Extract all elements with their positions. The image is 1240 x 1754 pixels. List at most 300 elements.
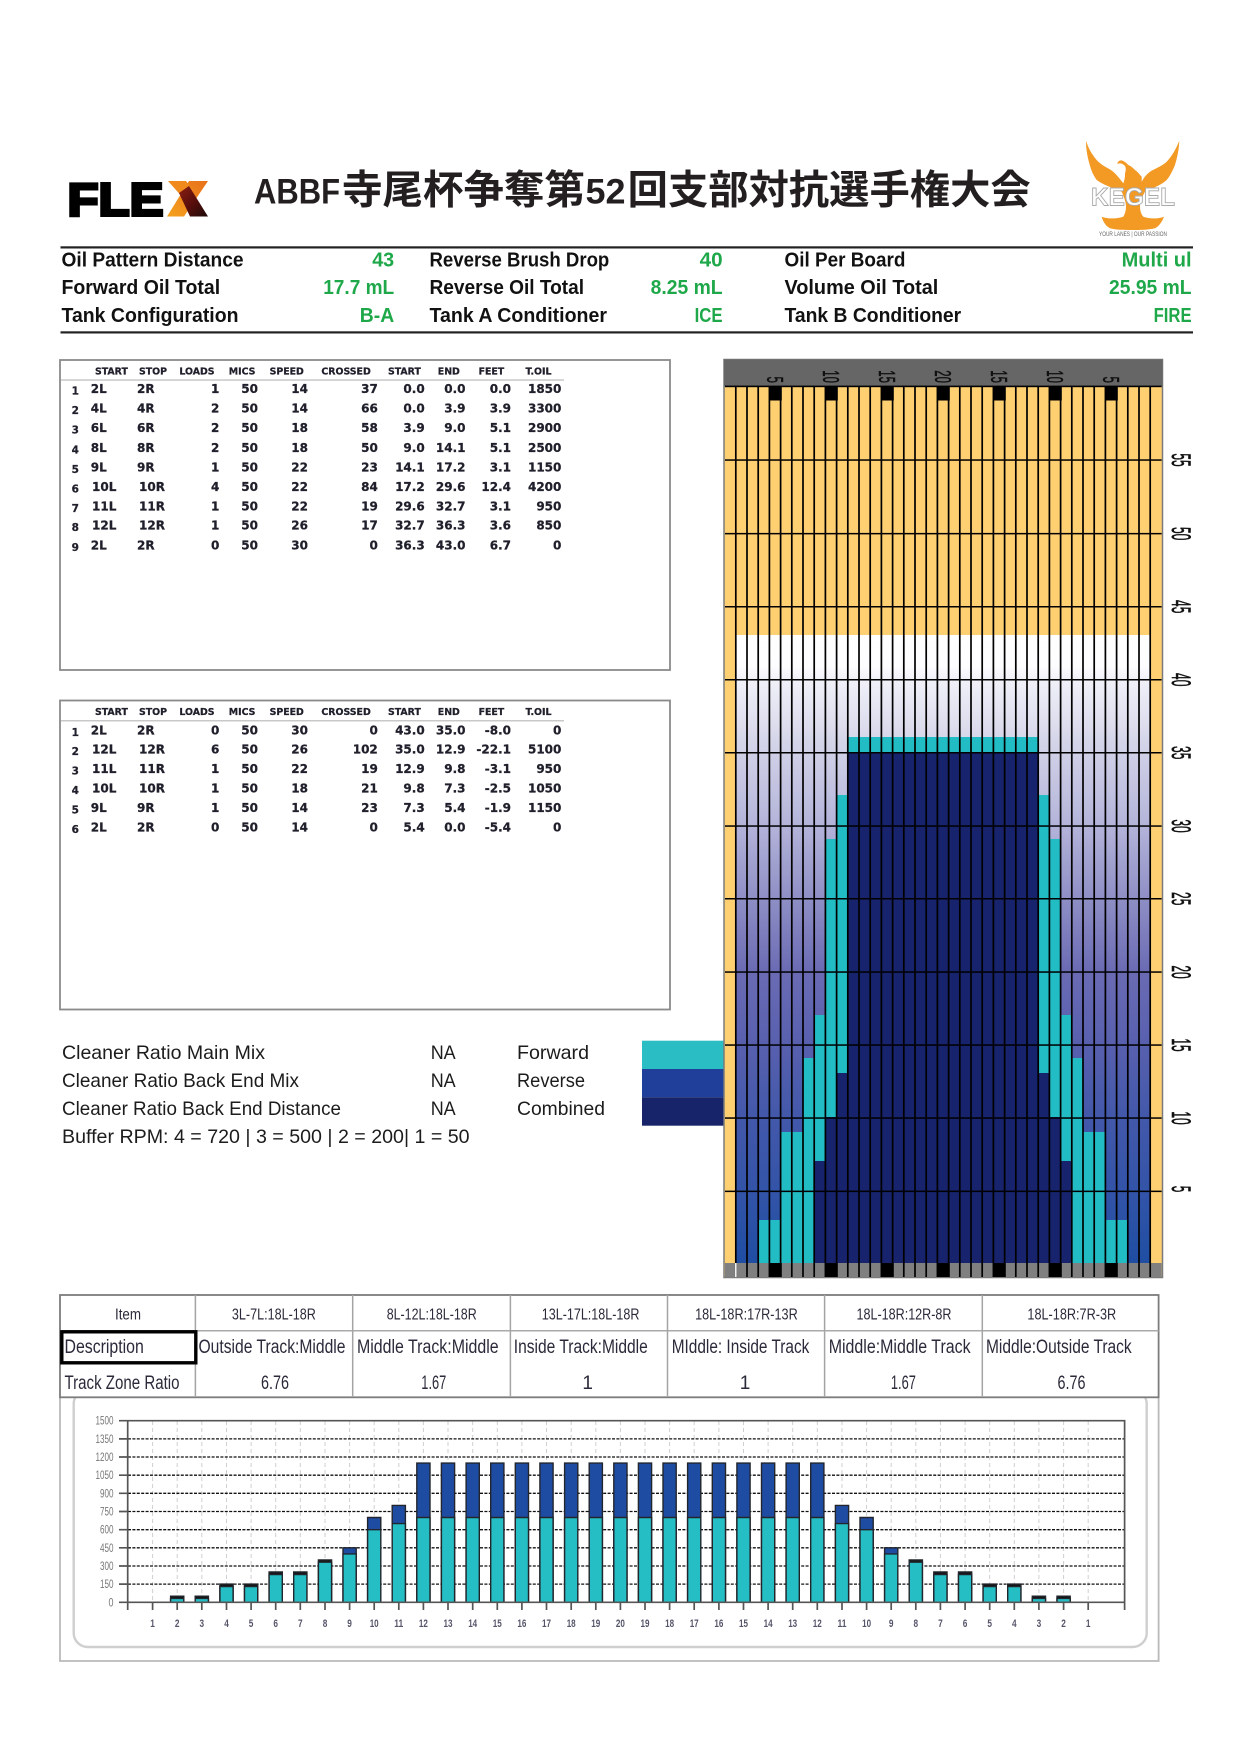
forward table numeric values: 9.0 — [403, 441, 425, 455]
reverse table numeric values: 50 — [241, 743, 258, 757]
reverse table numeric values: 0 — [211, 820, 219, 834]
distance labels: 55 — [1166, 453, 1196, 467]
reverse table start and stop boards: 10R — [139, 782, 165, 796]
forward table numeric values: 1850 — [528, 382, 561, 396]
forward table numeric values: 30 — [291, 538, 308, 552]
table row: item: Item — [115, 1306, 141, 1324]
y axis labels: 1200 — [96, 1452, 114, 1464]
y axis labels: 0 — [108, 1597, 114, 1609]
forward table numeric values: 43.0 — [436, 538, 466, 552]
labels column 1: Tank Configuration — [62, 305, 238, 327]
x axis board labels: 20 — [616, 1618, 625, 1630]
x axis board labels: 9 — [347, 1618, 352, 1630]
forward table numeric values: 1 — [211, 499, 219, 513]
title — [254, 168, 1031, 212]
forward table start and stop boards: 10R — [139, 480, 165, 494]
distance labels: 25 — [1166, 892, 1196, 905]
x axis board labels: 3 — [1037, 1618, 1041, 1630]
forward table numeric values: 22 — [291, 460, 308, 474]
forward table numeric values: 3.9 — [403, 421, 425, 435]
reverse table numeric values: 50 — [241, 782, 258, 796]
forward table header row — [95, 366, 551, 377]
lane oil graph: 15 — [986, 370, 1012, 383]
reverse table numeric values: 9.8 — [403, 782, 425, 796]
x axis board labels: 10 — [862, 1618, 871, 1630]
forward table numeric values: 1 — [211, 519, 219, 533]
forward table numeric values: 58 — [361, 421, 378, 435]
reverse table row index — [72, 727, 79, 836]
forward table header row: LOADS — [179, 366, 215, 377]
forward table numeric values: 50 — [241, 421, 258, 435]
table row: description: Inside Track:Middle — [514, 1337, 648, 1358]
x axis board labels: 2 — [175, 1618, 180, 1630]
forward table numeric values: 50 — [361, 441, 378, 455]
values column 1 — [323, 250, 394, 327]
forward table numeric values: 50 — [241, 441, 258, 455]
x axis board labels: 15 — [493, 1618, 502, 1630]
table row: item: 18L-18R:12R-8R — [856, 1306, 952, 1324]
table row: item: 18L-18R:7R-3R — [1027, 1306, 1116, 1324]
table row: track zone ratio: 1 — [582, 1373, 593, 1394]
board number labels: 5 — [762, 376, 788, 383]
cleaner and buffer notes: Buffer RPM: 4 = 720 | 3 = 500 | 2 = 200| 1 = 50 — [62, 1126, 470, 1148]
forward table start and stop boards: 2L — [91, 538, 107, 552]
reverse table numeric values: -2.5 — [485, 782, 511, 796]
values column 3: FIRE — [1154, 305, 1192, 327]
table row: description: Description — [64, 1337, 144, 1358]
values column 1: 43 — [372, 250, 394, 272]
labels column 1: Forward Oil Total — [62, 277, 220, 299]
reverse table numeric values: 1050 — [528, 782, 561, 796]
forward table numeric values: 2 — [211, 421, 219, 435]
forward table numeric values: 19 — [361, 499, 378, 513]
x axis board labels: 6 — [273, 1618, 278, 1630]
y axis labels: 1350 — [96, 1434, 114, 1446]
reverse table numeric values: 1150 — [528, 801, 561, 815]
x axis board labels: 10 — [370, 1618, 379, 1630]
reverse table numeric values: 5.4 — [444, 801, 466, 815]
x axis board labels: 18 — [665, 1618, 674, 1630]
forward table row index — [72, 386, 79, 554]
forward table numeric values: 0 — [553, 538, 561, 552]
table row: track zone ratio: 1 — [740, 1373, 750, 1394]
reverse table start and stop boards: 2R — [137, 723, 155, 737]
values column 2: 8.25 mL — [651, 277, 723, 299]
reverse table numeric values: 43.0 — [395, 723, 425, 737]
forward table numeric values: 23 — [361, 460, 378, 474]
values column 3: 25.95 mL — [1109, 277, 1192, 299]
reverse table numeric values: 1 — [211, 801, 219, 815]
forward table numeric values: 22 — [291, 480, 308, 494]
logo: FLEX — [68, 174, 208, 226]
forward table start and stop boards: 9R — [137, 460, 155, 474]
reverse table numeric values: 7.3 — [444, 782, 466, 796]
forward table start and stop boards: 8R — [137, 441, 155, 455]
labels column 2: Reverse Oil Total — [430, 277, 584, 299]
reverse table numeric values: 50 — [241, 762, 258, 776]
reverse table numeric values: 950 — [536, 762, 561, 776]
reverse table numeric values: -22.1 — [476, 743, 511, 757]
table row: description: Outside Track:Middle — [198, 1337, 346, 1358]
values column 1: B-A — [360, 305, 394, 327]
forward table numeric values: 17 — [361, 519, 378, 533]
forward table numeric values: 0.0 — [490, 382, 511, 396]
reverse table numeric values: 1 — [211, 762, 219, 776]
labels column 3: Volume Oil Total — [784, 277, 938, 299]
forward table row index: 8 — [72, 522, 79, 534]
reverse table header row: START — [388, 707, 421, 718]
x axis board labels: 1 — [150, 1618, 155, 1630]
table row: track zone ratio: Track Zone Ratio — [64, 1373, 180, 1394]
reverse table numeric values: 18 — [291, 782, 308, 796]
reverse table start and stop boards — [91, 723, 165, 834]
reverse table numeric values: -5.4 — [485, 820, 511, 834]
distance labels: 15 — [1166, 1038, 1196, 1052]
forward table header row: MICS — [229, 366, 256, 377]
values column 3: Multi ul — [1122, 250, 1192, 272]
distance labels — [1166, 453, 1196, 1192]
forward table numeric values: 84 — [361, 480, 378, 494]
reverse table start and stop boards: 12R — [139, 743, 165, 757]
forward table numeric values: 14.1 — [436, 441, 466, 455]
reverse table numeric values: 14 — [291, 801, 308, 815]
labels column 3: Tank B Conditioner — [784, 305, 961, 327]
lane oil graph: 10 — [818, 370, 844, 383]
forward table row index: 6 — [72, 484, 79, 496]
logo: KEGEL phoenix: KEGEL — [1091, 184, 1175, 212]
forward table numeric values: 50 — [241, 401, 258, 415]
x axis board labels: 5 — [987, 1618, 992, 1630]
title: ABBF — [254, 172, 340, 212]
reverse table numeric values: 1 — [211, 782, 219, 796]
forward table start and stop boards: 6R — [137, 421, 155, 435]
cleaner and buffer notes: Cleaner Ratio Back End Mix — [62, 1070, 299, 1092]
values column 2 — [651, 250, 723, 327]
distance labels: 10 — [1166, 1111, 1196, 1125]
x axis board labels: 17 — [690, 1618, 699, 1630]
x axis board labels: 19 — [640, 1618, 650, 1630]
lane oil graph: 10 — [1042, 370, 1068, 383]
forward table numeric values: 37 — [361, 382, 378, 396]
vertical light grid — [153, 1421, 1088, 1602]
forward table start and stop boards: 10L — [92, 480, 117, 494]
forward table numeric values: 950 — [536, 499, 561, 513]
distance labels: 40 — [1166, 673, 1196, 686]
forward table header row: END — [438, 366, 460, 377]
x axis board labels: 13 — [444, 1618, 452, 1630]
forward table row index: 5 — [72, 464, 79, 476]
forward table numeric values: 29.6 — [395, 499, 425, 513]
y axis labels: 450 — [100, 1543, 114, 1555]
forward table numeric values: 12.4 — [481, 480, 511, 494]
lane oil graph — [724, 360, 1196, 1278]
board number labels — [762, 370, 1124, 383]
forward table numeric values: 9.0 — [444, 421, 466, 435]
forward table numeric values: 50 — [241, 519, 258, 533]
x axis board labels: 1 — [1086, 1618, 1090, 1630]
reverse table numeric values: 12.9 — [436, 743, 466, 757]
reverse table start and stop boards: 9L — [91, 801, 107, 815]
forward table numeric values: 1150 — [528, 460, 561, 474]
reverse table header row — [95, 707, 551, 718]
bottom arrow markers — [735, 1263, 1118, 1277]
legend: Forward — [517, 1042, 589, 1064]
forward table start and stop boards: 6L — [91, 421, 107, 435]
forward table numeric values: 0 — [369, 538, 378, 552]
forward table numeric values — [211, 382, 561, 552]
reverse table header row: START — [95, 707, 128, 718]
reverse table numeric values: 0.0 — [444, 820, 466, 834]
reverse table row index: 6 — [72, 824, 79, 836]
panel: oil per board chart — [60, 1390, 1159, 1661]
forward table numeric values: 50 — [241, 480, 258, 494]
x axis board labels: 19 — [591, 1618, 600, 1630]
x axis board labels: 12 — [813, 1618, 822, 1630]
forward table start and stop boards: 4L — [91, 401, 107, 415]
lane oil graph: 15 — [874, 370, 900, 383]
legend: Combined — [517, 1098, 605, 1120]
labels column 2 — [430, 250, 609, 327]
forward table start and stop boards: 12R — [139, 519, 165, 533]
table row: description — [64, 1337, 1132, 1358]
forward table numeric values: 5.1 — [490, 441, 511, 455]
x axis board labels: 16 — [517, 1618, 526, 1630]
forward table numeric values: 14.1 — [395, 460, 425, 474]
x axis board labels: 18 — [567, 1618, 576, 1630]
cleaner and buffer notes: Cleaner Ratio Main Mix — [62, 1042, 265, 1064]
forward table numeric values: 22 — [291, 499, 308, 513]
track zone ratio table — [60, 1295, 1159, 1397]
reverse oil gradient background — [736, 635, 1151, 1263]
forward table start and stop boards: 2R — [137, 538, 155, 552]
forward table numeric values: 50 — [241, 382, 258, 396]
forward table numeric values: 66 — [361, 401, 378, 415]
reverse table numeric values: 23 — [361, 801, 378, 815]
reverse table numeric values: 50 — [241, 801, 258, 815]
reverse table numeric values: 6 — [211, 743, 219, 757]
x axis board labels: 17 — [542, 1618, 551, 1630]
x axis board labels — [150, 1618, 1090, 1630]
reverse table numeric values: 5100 — [528, 743, 561, 757]
distance labels: 45 — [1166, 600, 1196, 613]
x axis board labels: 8 — [323, 1618, 327, 1630]
values column 3 — [1109, 250, 1192, 327]
forward table numeric values: 18 — [291, 441, 308, 455]
forward table numeric values: 50 — [241, 460, 258, 474]
forward table numeric values: 0.0 — [444, 382, 466, 396]
x axis board labels: 6 — [963, 1618, 967, 1630]
table row: description: Middle:Middle Track — [829, 1337, 971, 1358]
forward table start and stop boards: 11R — [139, 499, 165, 513]
forward table header row: FEET — [479, 366, 505, 377]
forward table numeric values: 26 — [291, 519, 308, 533]
reverse table numeric values: 0 — [369, 820, 378, 834]
y axis labels: 750 — [100, 1506, 114, 1518]
foul line band — [725, 1263, 1162, 1277]
forward table numeric values: 32.7 — [436, 499, 466, 513]
table row: item — [115, 1306, 1116, 1324]
reverse table numeric values: 14 — [291, 820, 308, 834]
forward table row index: 7 — [72, 503, 79, 515]
forward table numeric values: 14 — [291, 382, 308, 396]
y axis labels — [96, 1416, 114, 1609]
values column 2: ICE — [695, 305, 723, 327]
reverse table start and stop boards: 2R — [137, 820, 155, 834]
forward table numeric values: 4 — [211, 480, 219, 494]
reverse table numeric values: 35.0 — [395, 743, 425, 757]
forward table numeric values: 36.3 — [436, 519, 466, 533]
reverse table numeric values: 19 — [361, 762, 378, 776]
labels column 3: Oil Per Board — [784, 250, 905, 272]
reverse table row index: 1 — [72, 727, 79, 739]
x axis board labels: 9 — [889, 1618, 894, 1630]
forward table numeric values: 0.0 — [403, 401, 425, 415]
x axis board labels: 14 — [764, 1618, 773, 1630]
panel: forward oil table — [60, 360, 670, 670]
x axis board labels: 2 — [1061, 1618, 1066, 1630]
reverse table numeric values: 35.0 — [436, 723, 466, 737]
lane oil graph: 5 — [1166, 1186, 1196, 1192]
reverse table header row: LOADS — [179, 707, 215, 718]
forward table numeric values: 3.1 — [490, 499, 511, 513]
reverse table numeric values: 30 — [291, 723, 308, 737]
forward table header row: START — [95, 366, 128, 377]
table row: item: 18L-18R:17R-13R — [695, 1306, 798, 1324]
table row: description: Middle Track:Middle — [357, 1337, 499, 1358]
forward table row index: 2 — [72, 405, 79, 417]
forward table numeric values: 6.7 — [490, 538, 511, 552]
reverse table numeric values: 0 — [553, 820, 561, 834]
reverse table numeric values: 21 — [361, 782, 378, 796]
labels column 2: Tank A Conditioner — [430, 305, 607, 327]
logo: KEGEL phoenix: YOUR LANES | OUR PASSION — [1099, 232, 1167, 238]
forward table numeric values: 4200 — [528, 480, 561, 494]
horizontal dashed grid — [128, 1439, 1125, 1584]
chart axes and ticks — [119, 1421, 1125, 1610]
forward table numeric values: 5.1 — [490, 421, 511, 435]
reverse table numeric values: 7.3 — [403, 801, 425, 815]
y axis labels: 150 — [100, 1579, 114, 1591]
title: 52 — [586, 172, 626, 212]
forward table row index: 4 — [72, 444, 79, 456]
reverse table numeric values — [211, 723, 561, 834]
forward table numeric values: 3.9 — [444, 401, 466, 415]
values column 1: 17.7 mL — [323, 277, 394, 299]
forward table numeric values: 0 — [211, 538, 219, 552]
distance labels: 30 — [1166, 819, 1196, 833]
logo: FLEX: FLE — [68, 174, 164, 226]
labels column 1 — [62, 250, 244, 327]
table row: item: 13L-17L:18L-18R — [542, 1306, 639, 1324]
reverse table numeric values: 0 — [211, 723, 219, 737]
distance labels: 35 — [1166, 746, 1196, 759]
reverse table header row: STOP — [139, 707, 167, 718]
reverse table numeric values: 0 — [553, 723, 561, 737]
distance labels: 50 — [1166, 527, 1196, 540]
cleaner and buffer notes: NA — [431, 1098, 456, 1120]
forward table numeric values: 3.6 — [490, 519, 511, 533]
combined oil navy columns — [815, 752, 1072, 1263]
low bar black caps — [171, 1560, 1070, 1602]
reverse table header row: MICS — [229, 707, 256, 718]
cleaner and buffer notes — [62, 1042, 470, 1148]
distance labels: 20 — [1166, 965, 1196, 979]
cleaner and buffer notes: NA — [431, 1042, 456, 1064]
reverse table row index: 4 — [72, 785, 79, 797]
top arrow markers — [769, 387, 1118, 400]
forward table row index: 9 — [72, 542, 79, 554]
forward table numeric values: 32.7 — [395, 519, 425, 533]
y axis labels: 300 — [100, 1561, 114, 1573]
forward table start and stop boards: 4R — [137, 401, 155, 415]
values column 2: 40 — [700, 250, 723, 272]
y axis labels: 600 — [100, 1525, 114, 1537]
forward table numeric values: 17.2 — [395, 480, 425, 494]
forward table numeric values: 3300 — [528, 401, 561, 415]
reverse table row index: 3 — [72, 766, 79, 778]
forward table row index: 1 — [72, 386, 79, 398]
description highlight box — [62, 1332, 196, 1363]
board number labels: 5 — [1098, 376, 1124, 383]
forward table header row: STOP — [139, 366, 167, 377]
reverse table row index: 5 — [72, 804, 79, 816]
reverse oil bars — [343, 1463, 898, 1602]
x axis board labels: 16 — [714, 1618, 723, 1630]
x axis board labels: 5 — [249, 1618, 253, 1630]
y axis labels: 1500 — [96, 1416, 114, 1428]
forward table numeric values: 50 — [241, 499, 258, 513]
forward table start and stop boards — [91, 382, 165, 552]
reverse table start and stop boards: 2L — [91, 723, 107, 737]
x axis board labels: 11 — [394, 1618, 403, 1630]
reverse table start and stop boards: 11R — [139, 762, 165, 776]
reverse table numeric values: 102 — [353, 743, 378, 757]
reverse table numeric values: 26 — [291, 743, 308, 757]
forward table start and stop boards: 9L — [91, 460, 107, 474]
reverse table numeric values: 50 — [241, 820, 258, 834]
reverse table numeric values: -3.1 — [485, 762, 511, 776]
logo: KEGEL phoenix — [1086, 141, 1179, 238]
forward table numeric values: 3.1 — [490, 460, 511, 474]
reverse table numeric values: 50 — [241, 723, 258, 737]
forward table numeric values: 2500 — [528, 441, 561, 455]
forward table header row: T.OIL — [526, 366, 551, 377]
forward table header row: START — [388, 366, 421, 377]
title: 寺尾杯争奪第 — [342, 168, 585, 212]
forward table header row: CROSSED — [321, 366, 371, 377]
x axis board labels: 13 — [788, 1618, 797, 1630]
cleaner and buffer notes: NA — [431, 1070, 456, 1092]
table row: track zone ratio: 1.67 — [891, 1373, 916, 1394]
x axis board labels: 12 — [419, 1618, 428, 1630]
forward table numeric values: 2900 — [528, 421, 561, 435]
panel: reverse oil table — [60, 700, 670, 1010]
forward table header row: SPEED — [270, 366, 304, 377]
x axis board labels: 7 — [298, 1618, 303, 1630]
forward table numeric values: 50 — [241, 538, 258, 552]
x axis board labels: 14 — [468, 1618, 478, 1630]
labels column 2: Reverse Brush Drop — [430, 250, 609, 272]
table row: track zone ratio — [64, 1373, 1086, 1394]
reverse table start and stop boards: 10L — [92, 782, 117, 796]
reverse table numeric values: -8.0 — [485, 723, 511, 737]
y axis labels: 1050 — [96, 1470, 114, 1482]
reverse table start and stop boards: 11L — [92, 762, 117, 776]
forward table numeric values: 3.9 — [490, 401, 511, 415]
table row: item: 8L-12L:18L-18R — [387, 1306, 477, 1324]
reverse table header row: CROSSED — [321, 707, 371, 718]
reverse table start and stop boards: 12L — [92, 743, 117, 757]
